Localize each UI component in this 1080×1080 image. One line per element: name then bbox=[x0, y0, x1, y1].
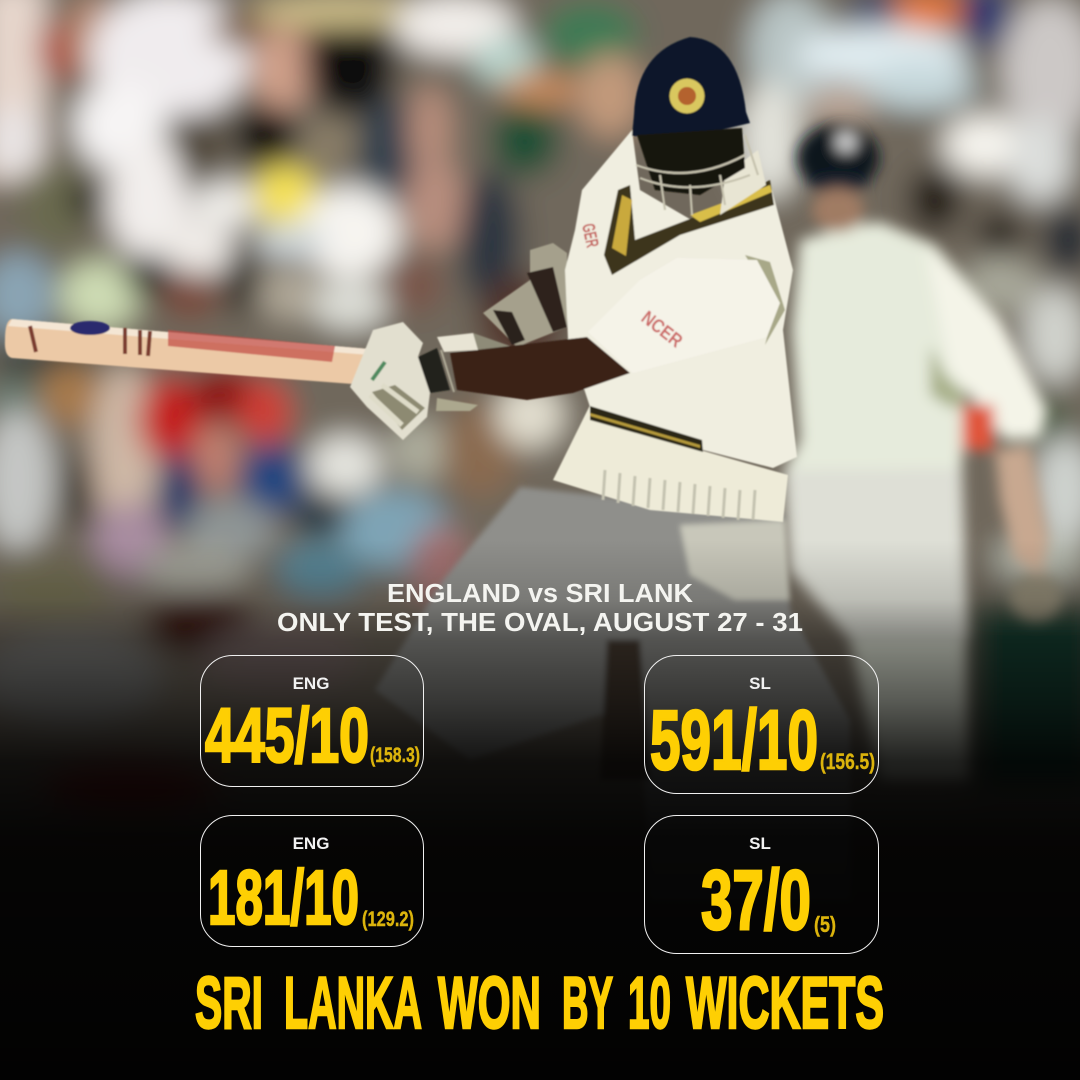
sleeve shadow bbox=[745, 255, 785, 345]
shirt bbox=[565, 130, 797, 468]
score card: England first innings: ENG bbox=[293, 674, 329, 693]
match heading bbox=[277, 580, 803, 637]
score card: England second innings bbox=[200, 816, 424, 946]
sleeve sponsor text: NCER bbox=[637, 307, 686, 352]
wrist band bbox=[418, 348, 450, 393]
waist stripes bbox=[590, 406, 703, 452]
dark gradient overlay bbox=[0, 540, 1080, 1080]
score card: England second innings: (129.2) bbox=[362, 908, 414, 931]
score card: England first innings: (158.3) bbox=[370, 744, 420, 767]
face bbox=[637, 128, 745, 195]
score card: Sri Lanka second innings: SL bbox=[749, 834, 771, 853]
result headline: LANKA bbox=[284, 963, 422, 1044]
score card: Sri Lanka first innings: 591/10 bbox=[650, 693, 818, 787]
match heading: ENGLAND vs SRI LANK bbox=[387, 580, 694, 608]
trousers bbox=[375, 487, 850, 900]
score card: England first innings: 445/10 bbox=[205, 693, 369, 779]
result headline: WON bbox=[438, 963, 541, 1044]
badge bbox=[670, 78, 704, 114]
top-left crowd bbox=[0, 0, 45, 180]
arm guard bbox=[483, 243, 567, 347]
result headline: 10 bbox=[628, 963, 671, 1044]
result headline bbox=[195, 963, 884, 1044]
sleeve bbox=[588, 258, 780, 373]
batsman bbox=[350, 37, 797, 522]
score card: Sri Lanka second innings bbox=[644, 816, 878, 954]
background fielder bbox=[784, 125, 1062, 780]
collar V bbox=[604, 180, 774, 275]
gloves bbox=[350, 322, 430, 440]
score card: Sri Lanka second innings: 37/0 bbox=[701, 853, 811, 947]
sweater ribbing bbox=[603, 470, 755, 520]
result headline: SRI bbox=[195, 963, 263, 1044]
forearm bbox=[450, 337, 630, 400]
match heading: ONLY TEST, THE OVAL, AUGUST 27 - 31 bbox=[277, 609, 803, 637]
result headline: BY bbox=[562, 963, 613, 1044]
score card: England second innings: ENG bbox=[293, 834, 329, 853]
helmet bbox=[632, 37, 750, 137]
score card: Sri Lanka first innings: SL bbox=[749, 674, 771, 693]
bat bbox=[5, 319, 370, 385]
top-right crowd bbox=[748, 0, 832, 108]
waist sweater bbox=[553, 405, 788, 522]
score card: Sri Lanka second innings: (5) bbox=[814, 912, 836, 937]
score card: England first innings bbox=[200, 656, 424, 786]
mid-left crowd bbox=[0, 378, 45, 422]
result headline: WICKETS bbox=[686, 963, 884, 1044]
score card: England second innings: 181/10 bbox=[208, 855, 359, 941]
neck collar right bbox=[720, 150, 766, 215]
chest sponsor text: GER bbox=[578, 222, 603, 249]
score card: Sri Lanka first innings: (156.5) bbox=[820, 749, 875, 774]
helmet grille bbox=[636, 135, 758, 215]
score card: Sri Lanka first innings bbox=[644, 656, 878, 794]
